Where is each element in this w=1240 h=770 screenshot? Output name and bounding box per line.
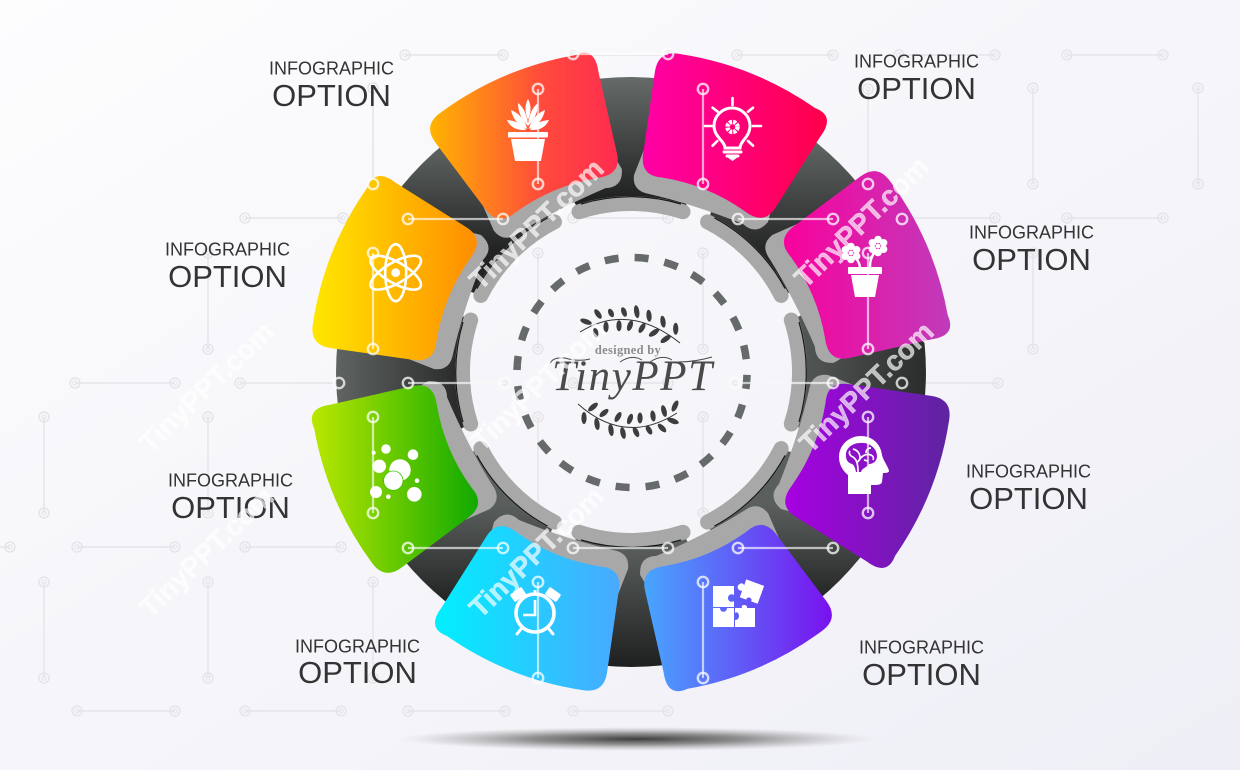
dark ring wedges (336, 77, 926, 667)
icon: potted plant (507, 99, 549, 161)
watermarks: TinyPPT.com (463, 481, 610, 624)
card: green (267, 342, 514, 589)
icon: light bulb with gear (705, 98, 761, 161)
label: top left: OPTION (272, 78, 391, 113)
label: top left: INFOGRAPHIC (269, 58, 394, 78)
card: magenta (748, 155, 995, 402)
label: lower right (966, 462, 1091, 516)
label: bottom right (859, 638, 984, 692)
card: pink-red (643, 53, 827, 218)
label: lower left: INFOGRAPHIC (168, 470, 293, 490)
logo swashes (550, 357, 712, 364)
watermarks: TinyPPT.com (793, 316, 940, 459)
label: upper right (969, 222, 1094, 277)
label: lower right: INFOGRAPHIC (966, 462, 1091, 482)
label: top right: INFOGRAPHIC (854, 52, 979, 72)
card: purple (785, 384, 950, 568)
label: top left (269, 58, 394, 113)
watermarks (133, 151, 940, 624)
dashed centre ring (517, 258, 747, 488)
icon: jigsaw puzzle (713, 577, 764, 627)
icon: alarm clock (510, 587, 561, 634)
card: cyan (435, 526, 619, 691)
label: bottom right: INFOGRAPHIC (859, 638, 984, 658)
label: bottom right: OPTION (862, 657, 981, 692)
logo wreath top (579, 305, 680, 345)
logo text: TinyPPT: TinyPPT (552, 353, 715, 400)
icon: head with brain (839, 436, 889, 494)
logo text: designed by: designed by (595, 343, 662, 357)
logo wreath bottom (578, 399, 680, 439)
card: yellow (312, 176, 477, 360)
labels (165, 52, 1094, 692)
icon: atom (366, 244, 426, 301)
icon: flower pot (842, 236, 887, 297)
icon: bubbles (370, 444, 422, 502)
label: bottom left: OPTION (298, 655, 417, 690)
label: upper right: OPTION (972, 242, 1091, 277)
label: upper right: INFOGRAPHIC (969, 222, 1094, 242)
label: top right (854, 52, 979, 106)
overlay nodes on cards (334, 179, 907, 388)
watermarks: TinyPPT.com (463, 153, 610, 296)
grey inner ring segments and card shadows (366, 107, 896, 637)
label: top right: OPTION (857, 71, 976, 106)
label: lower left: OPTION (171, 490, 290, 525)
watermarks: TinyPPT.com (465, 314, 612, 457)
label: upper left: INFOGRAPHIC (165, 240, 290, 260)
label: bottom left: INFOGRAPHIC (295, 636, 420, 656)
card: violet-blue (601, 489, 848, 736)
watermarks: TinyPPT.com (788, 151, 935, 294)
label: upper left (165, 240, 290, 294)
watermarks: TinyPPT.com (133, 316, 280, 459)
watermarks: TinyPPT.com (133, 481, 280, 624)
card: orange (414, 8, 661, 255)
label: lower left (168, 470, 293, 525)
overlay circuit lines over cards (373, 54, 868, 678)
label: lower right: OPTION (969, 481, 1088, 516)
logo: designed by TinyPPT with wreath (550, 305, 715, 439)
label: upper left: OPTION (168, 259, 287, 294)
floor shadow (399, 727, 875, 751)
label: bottom left (295, 636, 420, 690)
coloured cards (267, 8, 995, 736)
